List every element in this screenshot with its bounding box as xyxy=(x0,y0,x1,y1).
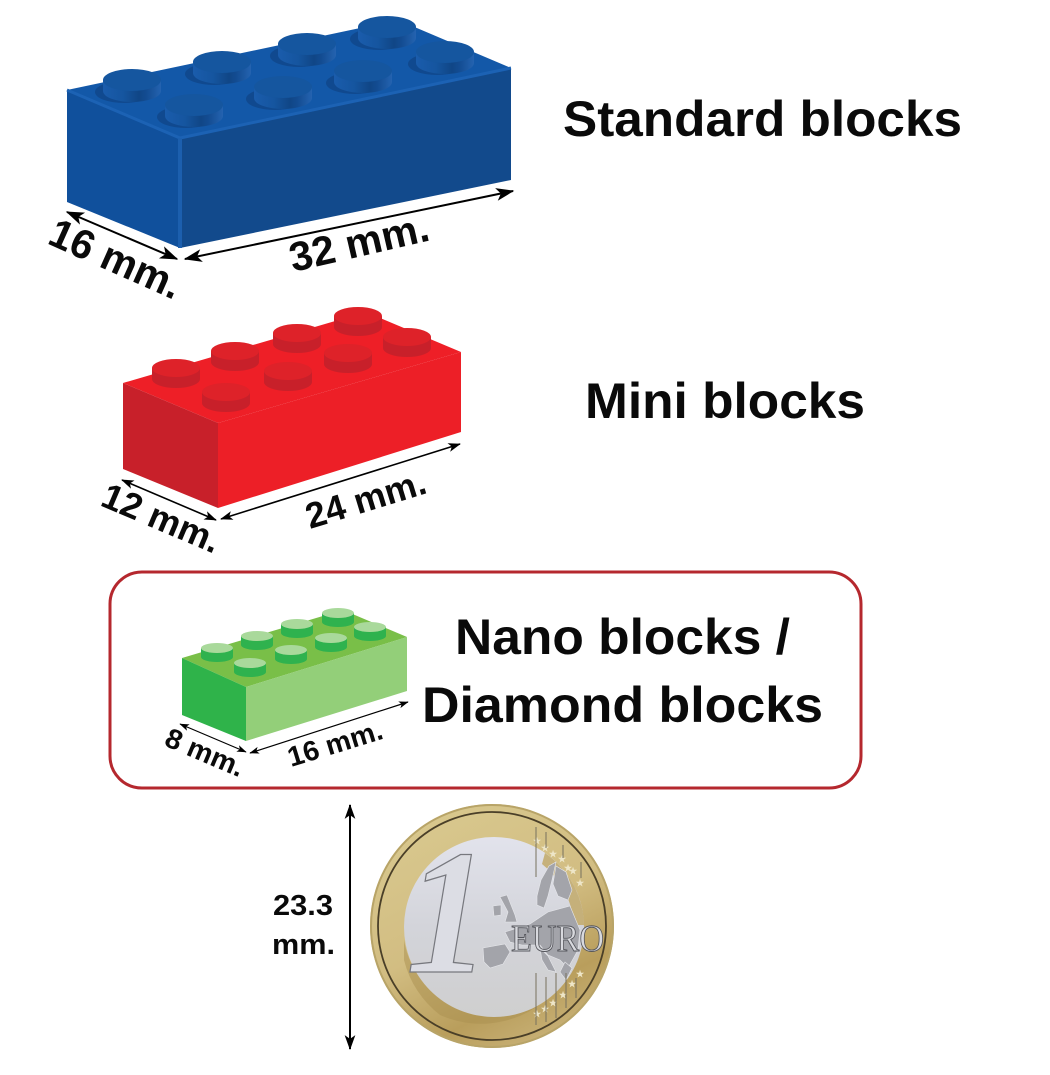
stars: ★ xyxy=(569,866,578,876)
stars xyxy=(533,836,585,1019)
stars: ★ xyxy=(533,836,542,846)
arrow: 8 mm width xyxy=(180,724,246,752)
stars: ★ xyxy=(549,998,558,1008)
arrow: 32 mm length xyxy=(185,191,513,259)
panel: nano / diamond blocks callout xyxy=(110,572,861,788)
panel: standard blocks xyxy=(42,16,962,308)
icon: green brick xyxy=(182,608,407,741)
stars: ★ xyxy=(559,990,568,1000)
silver centre xyxy=(404,837,584,1017)
stars: ★ xyxy=(541,843,550,853)
numeral 1: 1 xyxy=(406,813,490,1011)
EURO lettering: EURO xyxy=(511,918,604,960)
heading: diamond blocks: Diamond blocks xyxy=(422,677,823,733)
arrow: 16 mm length xyxy=(250,702,408,753)
stars: ★ xyxy=(576,969,585,979)
heading: standard blocks: Standard blocks xyxy=(563,91,962,147)
icon: red brick xyxy=(123,307,461,508)
callout border xyxy=(110,572,861,788)
heading: mini blocks: Mini blocks xyxy=(585,373,865,429)
arrow: 24 mm length xyxy=(221,444,460,519)
stars: ★ xyxy=(533,1009,542,1019)
label: 23.3 mm xyxy=(272,890,335,961)
stars: ★ xyxy=(558,854,567,864)
icon: one euro coin xyxy=(370,804,614,1048)
arrow: 12 mm width xyxy=(122,480,216,520)
panel: coin size reference xyxy=(272,804,614,1049)
stars: ★ xyxy=(564,863,573,873)
label: 12 mm: 12 mm. xyxy=(96,475,227,561)
stars: ★ xyxy=(541,1004,550,1014)
map of Europe xyxy=(483,862,580,980)
engraved lines xyxy=(536,827,581,1025)
panel: mini blocks xyxy=(96,307,865,561)
stars: ★ xyxy=(549,849,558,859)
label: 23.3 mm: 23.3 xyxy=(273,890,333,922)
stars: ★ xyxy=(576,878,585,888)
arrow: 16 mm width xyxy=(67,212,177,259)
arrow: coin diameter xyxy=(349,805,351,1049)
label: 8 mm: 8 mm. xyxy=(161,722,249,783)
label: 16 mm: 16 mm. xyxy=(284,714,386,773)
icon: blue brick xyxy=(67,16,511,248)
label: 24 mm: 24 mm. xyxy=(300,461,431,537)
heading: nano blocks: Nano blocks / xyxy=(455,609,790,665)
stars: ★ xyxy=(568,979,577,989)
label: 16 mm: 16 mm. xyxy=(42,209,189,308)
label: 23.3 mm: mm. xyxy=(272,929,335,961)
label: 32 mm: 32 mm. xyxy=(285,204,433,281)
